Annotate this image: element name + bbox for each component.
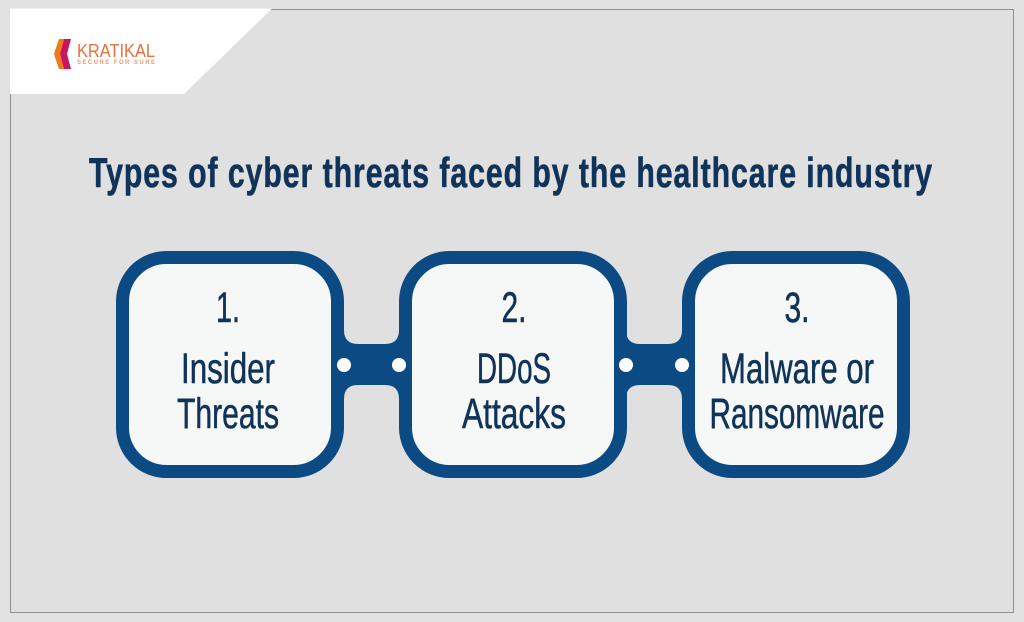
connector: 2 to 3 (626, 330, 682, 399)
label line 1: Insider (181, 345, 275, 393)
number 3: 3. (784, 284, 810, 332)
label line 1: Malware or (720, 345, 874, 393)
card 1: Insider Threats (122, 258, 338, 472)
label line 2: Attacks (462, 390, 566, 438)
card 2: DDoS Attacks (406, 258, 620, 472)
label line 2: Ransomware (710, 390, 884, 438)
connector: 1 to 2 (344, 330, 399, 399)
card 3: Malware or Ransomware (688, 258, 904, 472)
logo wordmark: KRATIKAL (77, 41, 155, 61)
title: Types of cyber threats faced by the healthcare industry (89, 149, 933, 196)
connector dots (337, 358, 689, 372)
number 1: 1. (216, 284, 240, 332)
logo banner (10, 8, 272, 94)
label line 1: DDoS (477, 345, 551, 393)
number 2: 2. (502, 284, 526, 332)
label line 2: Threats (177, 390, 279, 438)
icon: logo chevrons (54, 39, 71, 69)
logo tagline: SECURE FOR SURE (77, 60, 155, 66)
